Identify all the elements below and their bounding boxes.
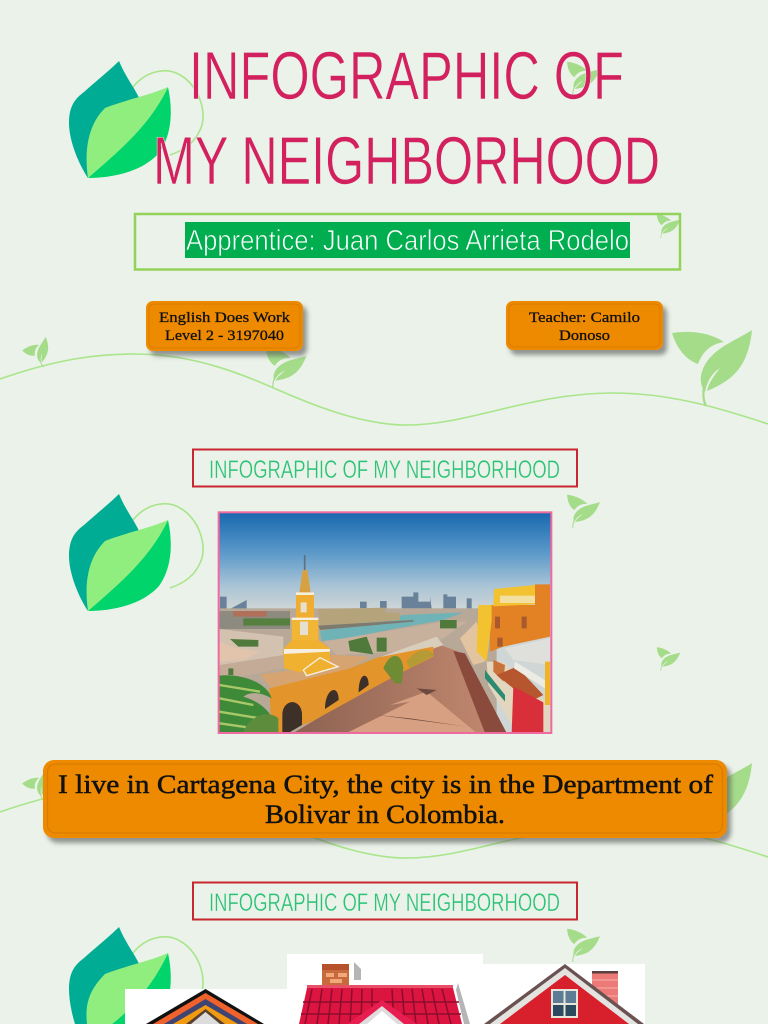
badge: course: English Does Work [159,310,291,326]
badge: teacher: Teacher: Camilo [529,310,640,326]
photo: Cartagena clock tower and city wall [219,512,551,733]
callout: city statement: Bolivar in Colombia. [265,799,505,829]
plaza [293,645,507,733]
title [153,38,660,199]
section heading 1: INFOGRAPHIC OF MY NEIGHBORHOOD [209,456,560,484]
callout: city statement: I live in Cartagena City, the city is in the Department of [58,769,713,799]
decoration: vine and sprouts, top [0,60,768,425]
trees [228,620,457,675]
apprentice banner: Apprentice: Juan Carlos Arrieta Rodelo [186,225,629,257]
icon: large leaf, middle [69,494,203,611]
photo frame [219,512,551,733]
title: INFOGRAPHIC OF [189,38,624,114]
section heading 2 [193,882,577,920]
palm [219,675,278,733]
decoration: vine and sprouts, middle [0,493,768,858]
warehouse [318,608,400,627]
section heading 2: INFOGRAPHIC OF MY NEIGHBORHOOD [209,889,560,917]
badge: teacher [506,301,663,350]
promenade [219,629,283,672]
right buildings [460,622,485,665]
tower [283,555,338,676]
badge: course [146,301,303,351]
water [320,612,463,641]
apprentice banner [135,214,680,270]
wall [269,647,433,733]
badge: course: Level 2 - 3197040 [165,328,284,344]
icon: large leaf, top [69,61,203,178]
decoration: sprout above houses [559,927,600,967]
roof terrace [260,655,370,689]
badge: teacher: Donoso [559,328,610,344]
illustration: house 2 [287,954,483,1024]
icon: large leaf, bottom [69,927,203,1024]
illustration: house 1 [125,989,288,1024]
illustration: house 3 [483,964,645,1024]
skyline [220,592,472,609]
callout: city statement [43,760,727,838]
land [219,608,497,733]
section heading 1 [193,450,577,486]
